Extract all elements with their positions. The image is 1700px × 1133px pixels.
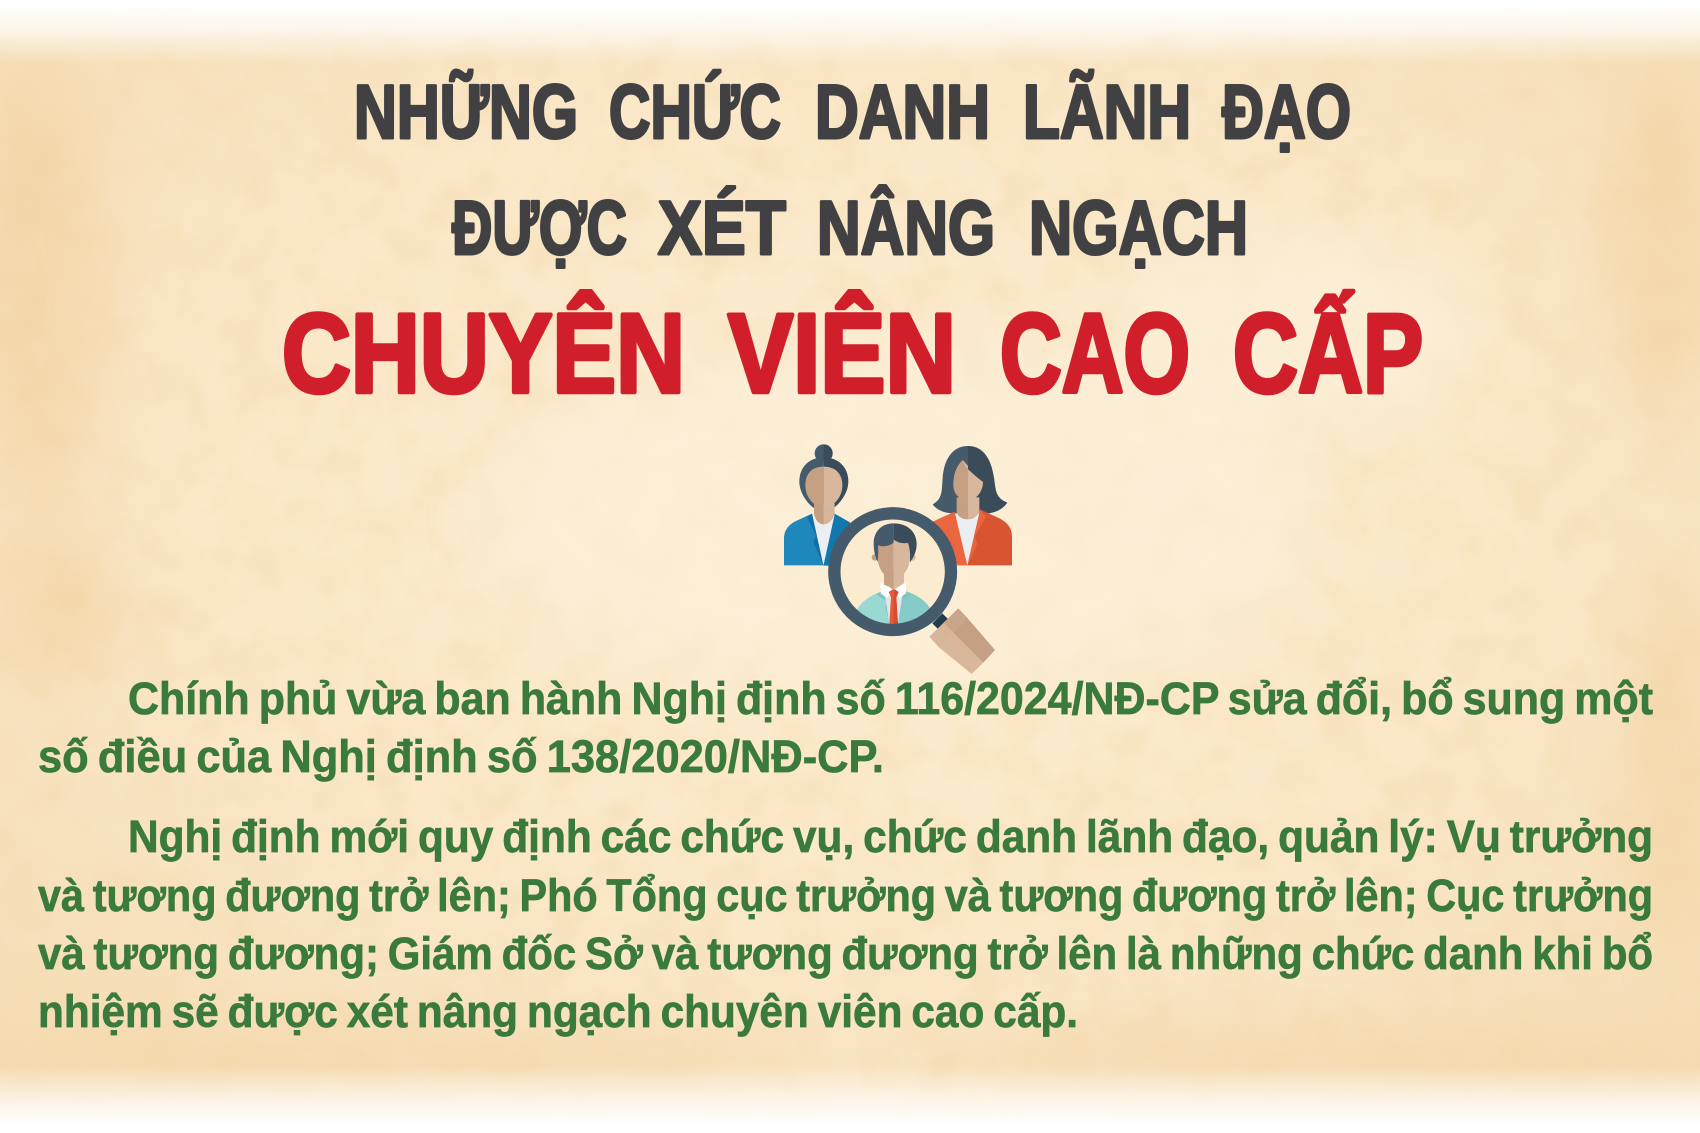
title: dark heading lines: CHỨC — [609, 70, 781, 155]
icon: woman with red jacket — [933, 446, 1012, 565]
text block: second paragraph: nhiệm sẽ được xét nâng ngạch chuyên viên cao cấp. — [38, 986, 1078, 1037]
title: dark heading lines: XÉT — [658, 186, 786, 271]
title: red highlight line: CHUYÊN — [282, 291, 685, 416]
title: dark heading lines: ĐẠO — [1222, 70, 1351, 155]
text block: first paragraph — [38, 673, 1653, 782]
title: dark heading lines — [354, 70, 1351, 271]
text block: first paragraph: Chính phủ vừa ban hành Nghị định số 116/2024/NĐ-CP sửa đổi, bổ sung một — [128, 673, 1653, 724]
title: dark heading lines: DANH — [815, 70, 990, 155]
title: dark heading lines: NÂNG — [817, 185, 995, 271]
title: red highlight line: CẤP — [1233, 291, 1423, 416]
text block: second paragraph — [38, 811, 1653, 1037]
title: dark heading lines: LÃNH — [1023, 70, 1191, 155]
title: dark heading lines: NHỮNG — [354, 70, 578, 155]
icon: man inside lens — [840, 523, 930, 624]
icon: three people under a magnifying glass — [784, 444, 1012, 674]
text block: first paragraph: số điều của Nghị định số 138/2020/NĐ-CP. — [38, 731, 884, 782]
title: red highlight line: VIÊN — [728, 291, 956, 416]
title: dark heading lines: ĐƯỢC — [452, 186, 627, 271]
text block: second paragraph: Nghị định mới quy định các chức vụ, chức danh lãnh đạo, quản lý: Vụ trưởng — [128, 811, 1653, 862]
title: dark heading lines: NGẠCH — [1029, 186, 1248, 271]
title: red highlight line: CAO — [1000, 291, 1190, 416]
title: red highlight line — [282, 291, 1423, 416]
icon: woman with blue jacket — [784, 444, 853, 566]
icon: magnifier ring and handle — [834, 513, 995, 674]
